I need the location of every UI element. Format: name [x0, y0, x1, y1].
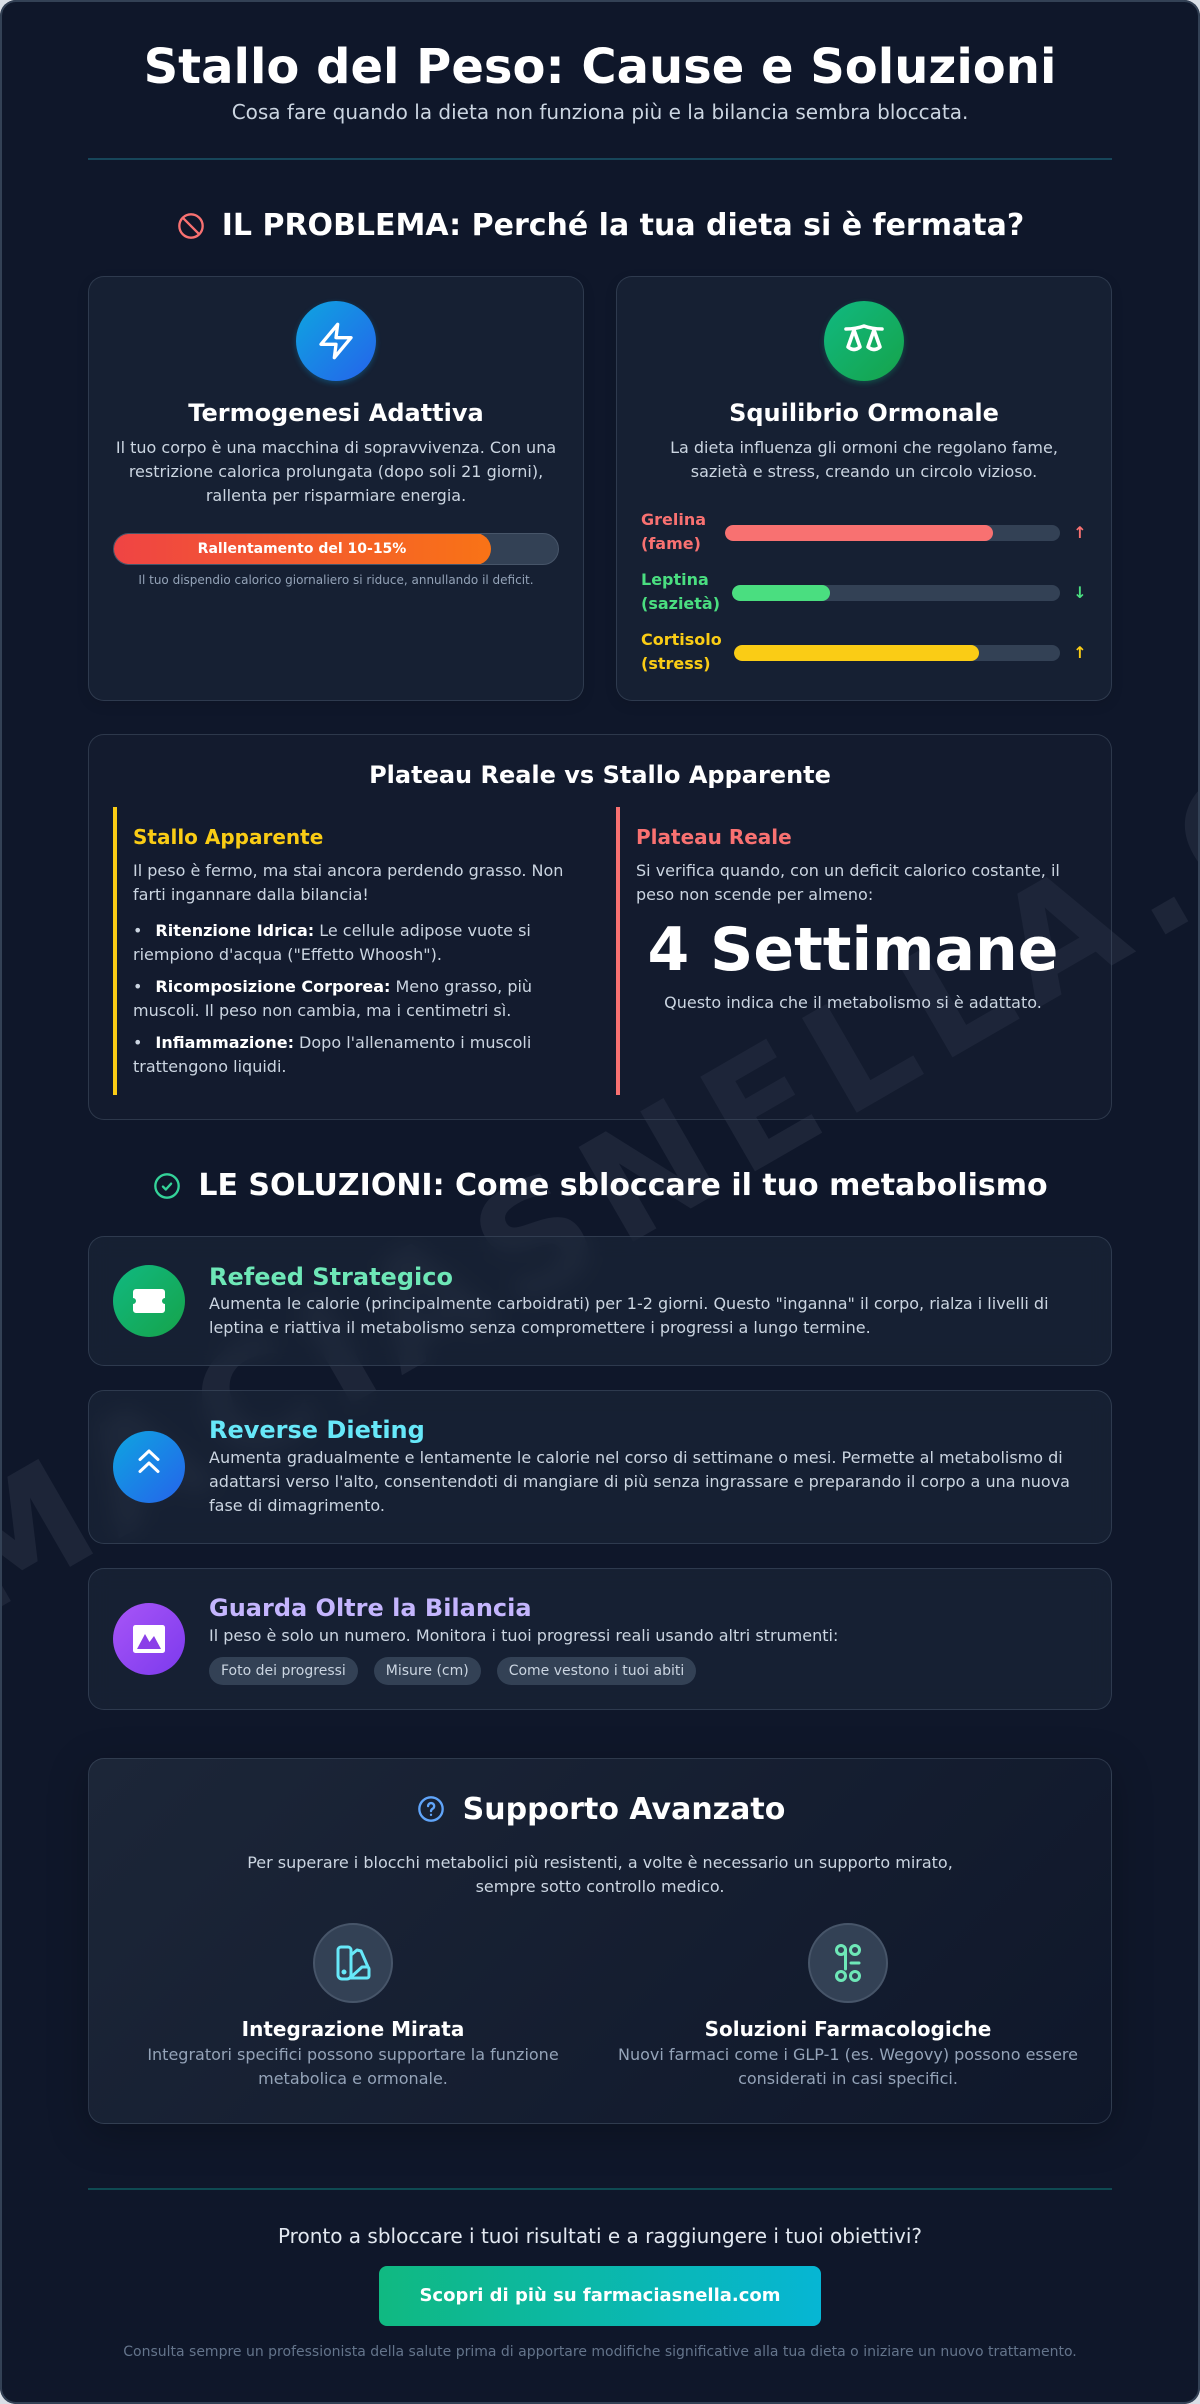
column: plateau reale [616, 807, 1086, 1095]
icon: scales [824, 301, 904, 381]
tag: Foto dei progressi [221, 1663, 346, 1679]
label [641, 630, 722, 673]
column text: Integratori specifici possono supportare la funzione [147, 2045, 559, 2064]
solution card: refeed strategico [88, 1236, 1112, 1366]
label: Grelina [641, 510, 706, 529]
title: Stallo del Peso: Cause e Soluzioni [144, 39, 1056, 95]
tag [497, 1657, 696, 1685]
solution text: fase di dimagrimento. [209, 1496, 385, 1515]
column: soluzioni farmacologiche [618, 1923, 1078, 2088]
label: (sazietà) [641, 594, 720, 613]
column text [147, 2045, 559, 2088]
bullet: infiammazione [133, 1033, 531, 1076]
tag [374, 1657, 481, 1685]
arrow down: ↓ [1073, 583, 1087, 602]
solution text [209, 1294, 1049, 1337]
solution heading: Refeed Strategico [209, 1263, 453, 1291]
label [641, 510, 706, 553]
solution text [209, 1448, 1070, 1515]
solution text: Aumenta le calorie (principalmente carboidrati) per 1-2 giorni. Questo "inganna" il corpo, rialza i livelli di [209, 1294, 1049, 1313]
bar [734, 645, 1060, 661]
icon: check circle [154, 1173, 180, 1199]
heading: le soluzioni [154, 1168, 1048, 1203]
column heading: Integrazione Mirata [242, 2017, 464, 2041]
solution card: reverse dieting [88, 1390, 1112, 1544]
column intro [636, 861, 1060, 904]
column: stallo apparente [113, 807, 583, 1095]
column heading: Soluzioni Farmacologiche [705, 2017, 991, 2041]
solution card: guarda oltre la bilancia [88, 1568, 1112, 1710]
solution text: Il peso è solo un numero. Monitora i tuoi progressi reali usando altri strumenti: [209, 1626, 838, 1645]
solution heading: Guarda Oltre la Bilancia [209, 1594, 532, 1622]
column intro: peso non scende per almeno: [636, 885, 873, 904]
panel intro: sempre sotto controllo medico. [476, 1877, 724, 1896]
panel: squilibrio ormonale [616, 276, 1112, 701]
panel: plateau reale vs stallo apparente [88, 734, 1112, 1120]
panel heading [418, 1792, 785, 1826]
card description: restrizione calorica prolungata (dopo soli 21 giorni), [129, 462, 543, 481]
column text: Nuovi farmaci come i GLP-1 (es. Wegovy) possono essere [618, 2045, 1078, 2064]
hormone row: grelina [641, 510, 1087, 553]
heading text: Supporto Avanzato [463, 1792, 785, 1826]
bullet: ricomposizione corporea: muscoli. Il peso non cambia, ma i centimetri sì. [133, 1001, 511, 1020]
label: (fame) [641, 534, 701, 553]
label [641, 570, 720, 613]
card description [116, 438, 556, 505]
tag: Misure (cm) [386, 1663, 469, 1679]
panel heading: Plateau Reale vs Stallo Apparente [369, 761, 831, 789]
heading: il problema [178, 208, 1024, 243]
cta button [379, 2266, 821, 2326]
bullet: ricomposizione corporea: Ricomposizione Corporea: Meno grasso, più [155, 977, 532, 996]
column intro: farti ingannare dalla bilancia! [133, 885, 369, 904]
icon: pills [808, 1923, 888, 2003]
bullet: infiammazione: • [133, 1033, 142, 1052]
card description: sazietà e stress, creando un circolo vizioso. [691, 462, 1037, 481]
note: Questo indica che il metabolismo si è adattato. [664, 993, 1042, 1012]
tags [209, 1657, 696, 1685]
bullet: ritenzione idrica [133, 921, 531, 964]
panel intro [247, 1853, 953, 1896]
bullet: ricomposizione corporea [133, 977, 532, 1020]
bullet: ritenzione idrica: riempiono d'acqua ("Effetto Whoosh"). [133, 945, 442, 964]
solution text: adattarsi verso l'alto, consentendoti di mangiare di più senza ingrassare e preparando il corpo a una nuova [209, 1472, 1070, 1491]
card heading: Squilibrio Ormonale [729, 399, 999, 427]
arrow up: ↑ [1073, 523, 1087, 542]
bullet: ritenzione idrica: • [133, 921, 142, 940]
icon: lightning bolt [296, 301, 376, 381]
card description: Il tuo corpo è una macchina di sopravvivenza. Con una [116, 438, 556, 457]
label: Cortisolo [641, 630, 722, 649]
label: (stress) [641, 654, 711, 673]
column intro: Il peso è fermo, ma stai ancora perdendo grasso. Non [133, 861, 563, 880]
bullet: infiammazione: trattengono liquidi. [133, 1057, 286, 1076]
column text: metabolica e ormonale. [258, 2069, 448, 2088]
heading text: LE SOLUZIONI: Come sbloccare il tuo metabolismo [198, 1168, 1048, 1203]
panel: supporto avanzato [88, 1758, 1112, 2124]
label: Leptina [641, 570, 709, 589]
column text: considerati in casi specifici. [738, 2069, 958, 2088]
icon: ban [178, 213, 204, 239]
column: integrazione mirata [147, 1923, 559, 2088]
card description: La dieta influenza gli ormoni che regolano fame, [670, 438, 1058, 457]
icon: photo [113, 1603, 185, 1675]
tag: Come vestono i tuoi abiti [509, 1663, 684, 1679]
bullet: infiammazione: Infiammazione: Dopo l'allenamento i muscoli [155, 1033, 531, 1052]
solution text: Aumenta gradualmente e lentamente le calorie nel corso di settimane o mesi. Permette al metabolismo di [209, 1448, 1063, 1467]
bar [732, 585, 1060, 601]
panel: termogenesi adattiva [88, 276, 584, 701]
panel intro: Per superare i blocchi metabolici più resistenti, a volte è necessario un supporto mirato, [247, 1853, 953, 1872]
column intro: Si verifica quando, con un deficit calorico costante, il [636, 861, 1060, 880]
big number: 4 Settimane [648, 915, 1058, 985]
tag [209, 1657, 358, 1685]
icon: ticket [113, 1265, 185, 1337]
icon: double chevron up [113, 1431, 185, 1503]
bullet: ritenzione idrica: Ritenzione Idrica: Le cellule adipose vuote si [155, 921, 531, 940]
cta button: Scopri di più su farmaciasnella.com [419, 2285, 781, 2306]
solution text: leptina e riattiva il metabolismo senza compromettere i progressi a lungo termine. [209, 1318, 871, 1337]
footer divider [88, 2188, 1112, 2190]
arrow up: ↑ [1073, 643, 1087, 662]
solution heading: Reverse Dieting [209, 1416, 425, 1444]
icon: swatch [313, 1923, 393, 2003]
footer prompt: Pronto a sbloccare i tuoi risultati e a raggiungere i tuoi obiettivi? [278, 2224, 922, 2248]
progress bar: slowdown [113, 533, 559, 565]
hormone row: leptina [641, 570, 1087, 613]
column intro [133, 861, 563, 904]
bar fill with label: Rallentamento del 10-15% [198, 541, 406, 557]
subtitle: Cosa fare quando la dieta non funziona più e la bilancia sembra bloccata. [232, 100, 968, 124]
bar [725, 525, 1060, 541]
icon: question circle [418, 1796, 444, 1822]
heading text: IL PROBLEMA: Perché la tua dieta si è fermata? [222, 208, 1024, 243]
card description: rallenta per risparmiare energia. [206, 486, 466, 505]
column heading: Plateau Reale [636, 825, 792, 849]
bar caption: Il tuo dispendio calorico giornaliero si riduce, annullando il deficit. [138, 573, 534, 587]
hormone row: cortisolo [641, 630, 1087, 673]
card description [670, 438, 1058, 481]
bar fill with label [113, 533, 491, 565]
card heading: Termogenesi Adattiva [188, 399, 484, 427]
column text [618, 2045, 1078, 2088]
disclaimer: Consulta sempre un professionista della salute prima di apportare modifiche significative alla tua dieta o iniziare un nuovo trattamento. [123, 2344, 1077, 2360]
bullet: ricomposizione corporea: • [133, 977, 142, 996]
header divider [88, 158, 1112, 160]
column heading: Stallo Apparente [133, 825, 323, 849]
